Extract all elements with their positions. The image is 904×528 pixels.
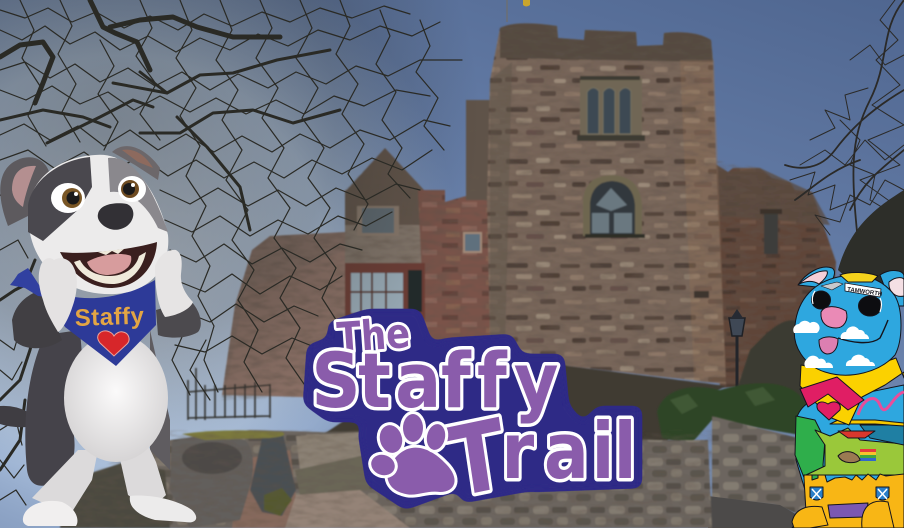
iron fence — [188, 368, 270, 420]
bandana knot — [10, 268, 46, 297]
logo word: Staffy: Staffy — [311, 338, 558, 426]
right foot — [130, 496, 196, 522]
sculpture body — [796, 385, 904, 528]
plaque — [694, 291, 709, 298]
red kayak — [838, 431, 875, 438]
gray right flank — [150, 330, 170, 470]
rainbow flag — [860, 449, 876, 461]
secondary boughs — [0, 50, 340, 470]
yellow sash band — [830, 420, 904, 426]
hedge and climber — [657, 320, 830, 445]
tree canopy shading — [0, 0, 480, 480]
belly — [64, 334, 168, 462]
right hand — [155, 250, 193, 317]
castle shields — [810, 487, 889, 500]
right bare tree — [785, 0, 904, 290]
sculpture left ear — [798, 267, 834, 288]
tower arched window — [583, 175, 645, 238]
pale rocks — [296, 432, 372, 470]
left lower range — [222, 190, 425, 400]
boulder — [170, 435, 253, 528]
right leg — [118, 445, 166, 510]
logo word: Trail: T — [442, 399, 513, 520]
sculpture eyes — [812, 291, 882, 316]
pale sky behind tree — [0, 0, 470, 528]
sculpture snout — [821, 307, 847, 328]
flag on pole — [507, 0, 530, 22]
right face patch — [108, 158, 168, 232]
castle — [188, 23, 836, 450]
right ear — [112, 146, 160, 180]
gabled house — [345, 148, 424, 270]
logo word: Trail: rail — [502, 407, 636, 497]
right arm — [156, 300, 201, 338]
tongue — [87, 254, 131, 275]
house window — [357, 206, 399, 236]
yellow castle — [792, 474, 904, 528]
lamp post — [729, 309, 745, 388]
red wall section — [418, 100, 492, 345]
bandana — [40, 280, 156, 366]
clouds — [793, 321, 875, 368]
logo paw print — [368, 414, 455, 495]
sculpture head — [794, 275, 901, 375]
left face patch — [28, 157, 92, 241]
logo navy backing — [303, 309, 642, 510]
stone grain — [222, 26, 836, 400]
heart on bandana — [98, 331, 129, 356]
small brown figure — [838, 452, 860, 463]
right wall window — [760, 209, 782, 254]
tail — [0, 406, 28, 427]
left arm — [12, 290, 62, 348]
right eye — [118, 176, 146, 202]
logo word: The: The — [335, 311, 412, 363]
heart — [817, 402, 840, 420]
yellow cap — [840, 272, 878, 282]
bay window — [345, 263, 425, 320]
grassy bank — [300, 342, 726, 450]
banner — [845, 283, 882, 298]
teal river — [860, 425, 904, 445]
main boughs — [0, 0, 280, 103]
mossy rock — [250, 434, 296, 516]
sculpture right ear — [880, 271, 904, 306]
head — [28, 155, 168, 294]
fine twigs — [0, 0, 462, 505]
foreground rocks and wall — [60, 430, 712, 528]
left bare tree — [0, 0, 480, 505]
sculpture smile — [838, 320, 888, 343]
colourful gate mosaic — [828, 503, 868, 518]
character: painted trail sculpture dog — [792, 267, 904, 528]
plane — [821, 282, 843, 290]
lime field — [806, 428, 904, 475]
right curtain wall — [712, 162, 836, 388]
bandana: yellow — [800, 358, 904, 425]
sculpture feet — [792, 501, 894, 528]
left ear — [0, 157, 50, 226]
main tower — [487, 23, 726, 384]
bandana: red panel — [800, 377, 864, 410]
lower teeth — [74, 252, 146, 284]
banner: TAMWORTH — [847, 287, 882, 298]
dark back and flank — [25, 330, 82, 486]
tower top window — [577, 76, 645, 141]
left eye — [51, 183, 85, 213]
small window — [464, 233, 481, 252]
tongue — [819, 337, 838, 354]
bandana label: Staffy — [74, 303, 145, 332]
nose — [98, 203, 133, 230]
moss ledge — [182, 430, 284, 440]
reddish gully — [232, 450, 300, 528]
path — [708, 496, 820, 528]
mouth — [60, 242, 157, 288]
upper teeth — [98, 249, 124, 255]
rainbow trail — [858, 392, 904, 415]
stone retaining wall — [712, 416, 808, 518]
character: cartoon Staffy dog — [0, 146, 201, 526]
green meadow — [795, 416, 826, 480]
logo: The Staffy Trail — [303, 309, 642, 520]
left foot — [23, 501, 77, 526]
left hand — [39, 258, 77, 332]
left leg — [32, 450, 98, 515]
